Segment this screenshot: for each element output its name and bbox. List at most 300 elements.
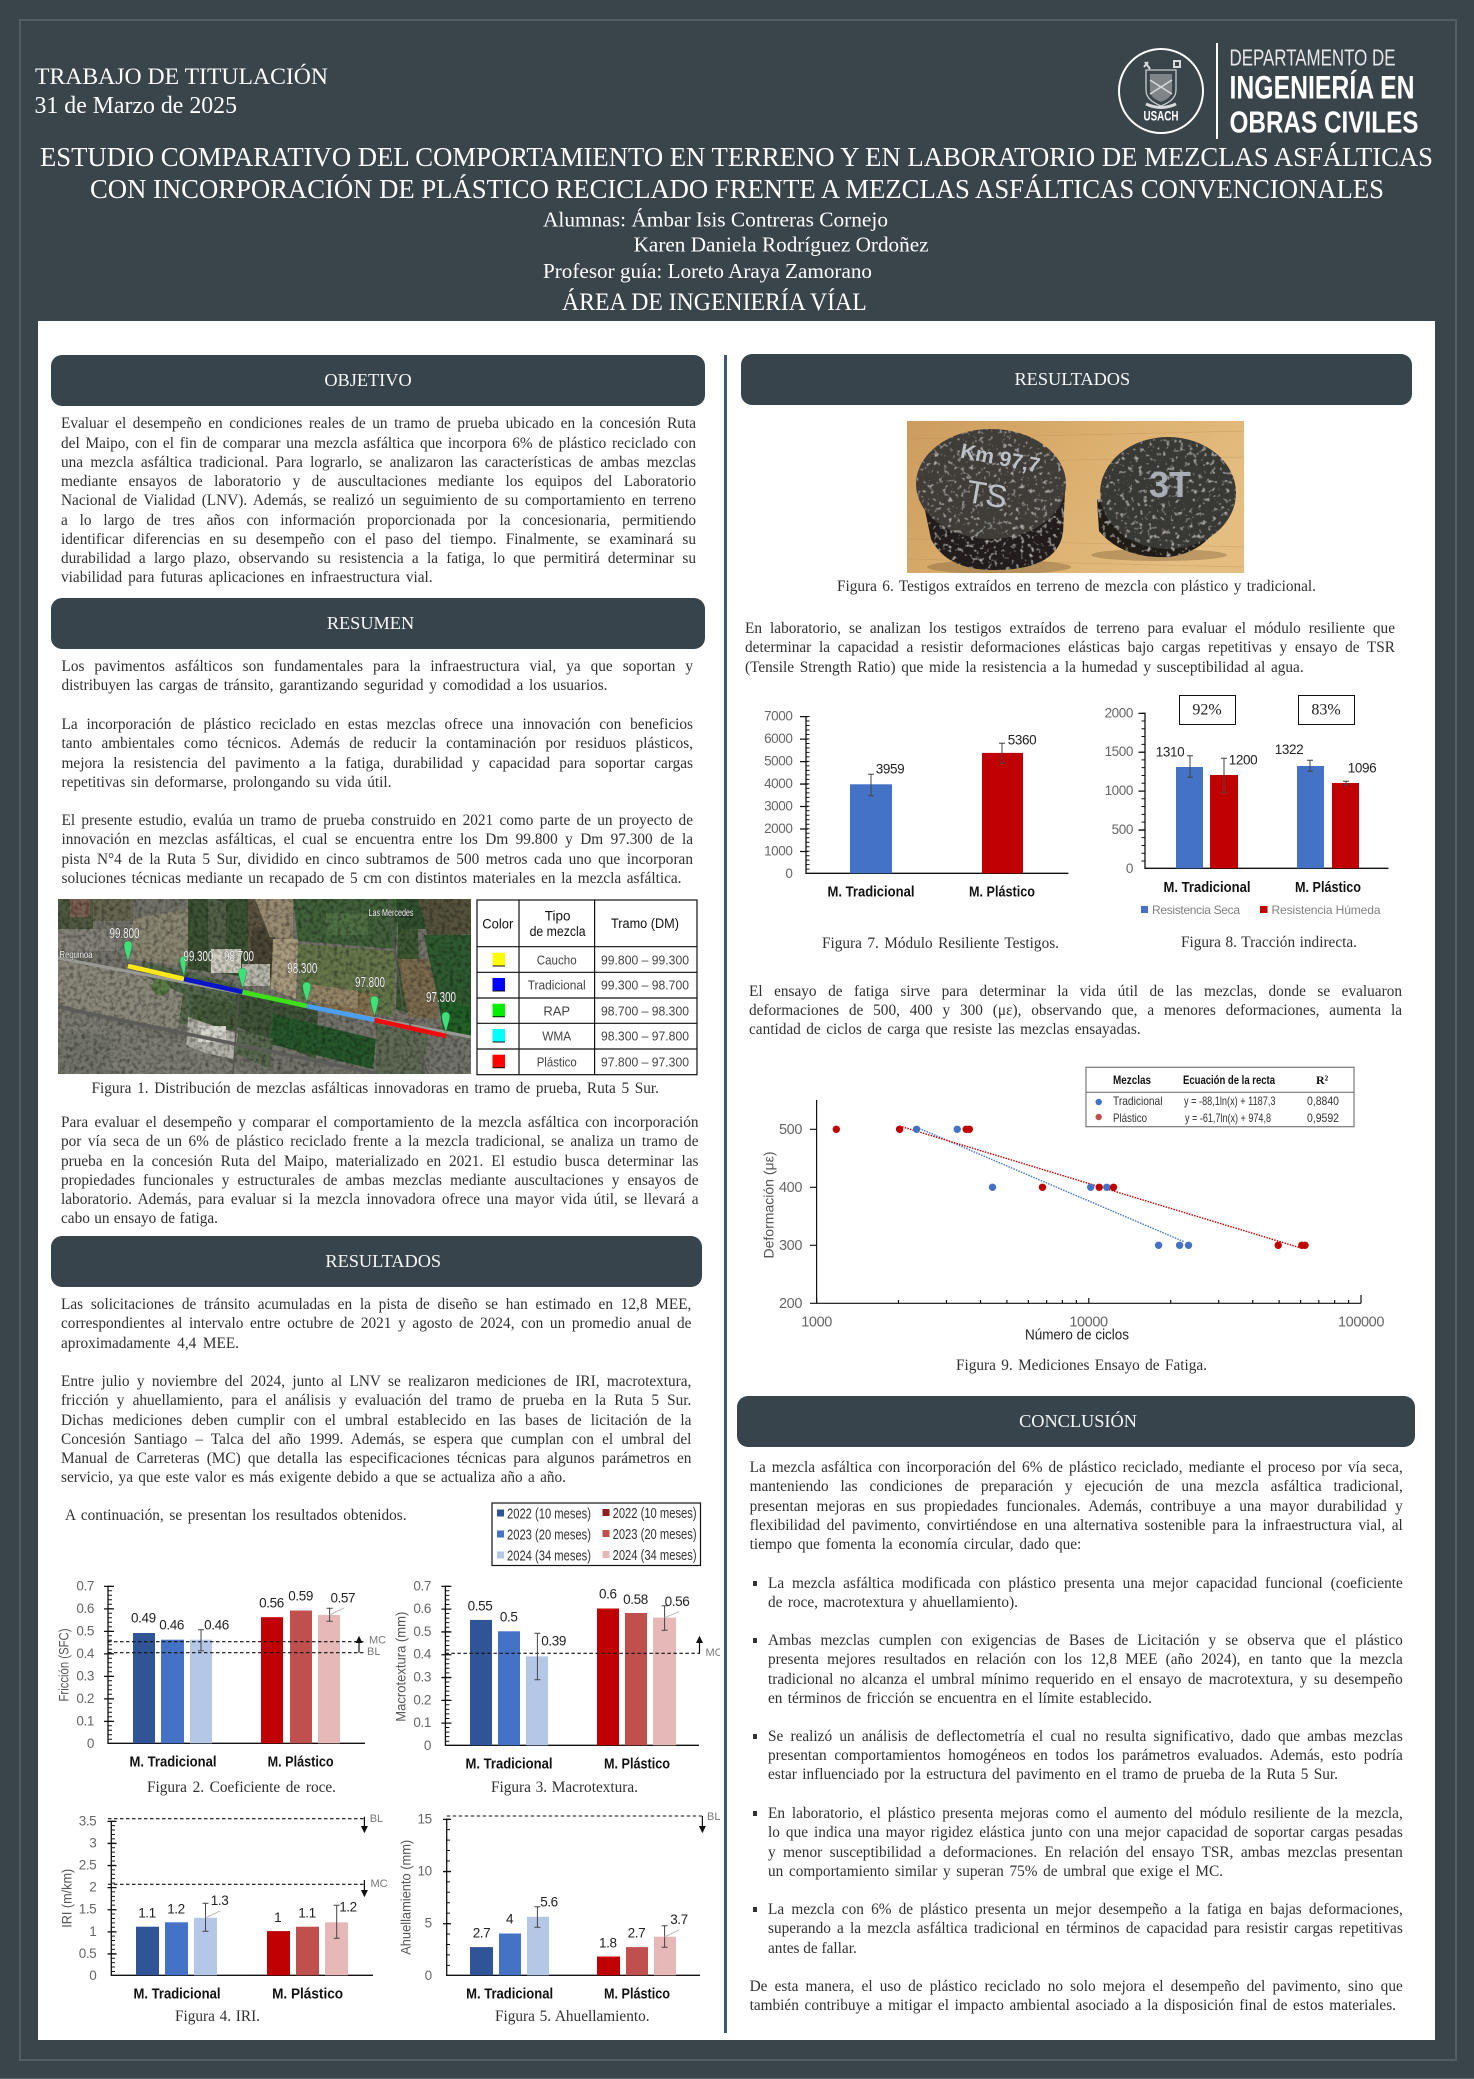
y axis title: Ahuellamiento (mm) (398, 1840, 414, 1955)
y axis title: IRI (m/km) (58, 1869, 74, 1928)
text: resumen 1: Los pavimentos asfálticos son fundamentales para la infraestructura vial, ya que soportan y (62, 658, 693, 675)
bullet 1: de roce, macrotextura y ahuellamiento). (768, 1594, 1018, 1611)
heading: resumen (51, 598, 705, 649)
axes (1142, 713, 1388, 868)
y tick labels: 0 (424, 1738, 431, 1753)
authors (543, 208, 929, 283)
map labels: 98.700 (224, 948, 254, 965)
y tick labels: 3000 (764, 798, 792, 814)
bullet 2: en términos de fricción se encuentra en el límite establecido. (768, 1690, 1152, 1707)
chart: figure 2 friction (56, 1578, 386, 1771)
bullet 4: un comportamiento similar y superan 75% de umbral que exige el MC. (768, 1863, 1223, 1880)
text: traffic: aproximadamente 4,4 MEE. (61, 1335, 239, 1352)
map background fields (58, 899, 471, 1074)
text: conclusion intro: presentan mejoras en sus propiedades funcionales. Además, contribuye a una mayor durabilidad y (750, 1498, 1403, 1515)
axis tick labels: 300 (779, 1238, 802, 1254)
equation table: y = -88,1ln(x) + 1187,3 (1184, 1094, 1276, 1108)
axis tick labels (779, 1122, 1384, 1331)
table grid (477, 900, 697, 1075)
bullet 5: La mezcla con 6% de plástico presenta un mejor desempeño a la fatiga en bajas deformaciones, (768, 1901, 1403, 1918)
value labels: 0.56 (259, 1596, 284, 1611)
value labels: 1096 (1348, 761, 1376, 776)
bullet 2: presenta mejores resultados en relación con los 12,8 MEE (año 2024), en tanto que la mezcla (768, 1651, 1403, 1668)
category labels (466, 1987, 670, 2003)
bars (470, 1917, 676, 1975)
table rows: 97.800 – 97.300 (601, 1054, 689, 1069)
coloured test sections (128, 966, 446, 1036)
table rows: Tradicional (528, 977, 586, 992)
y axis title: Fricción (SFC) (56, 1628, 72, 1702)
category labels (130, 1755, 334, 1771)
category labels: M. Plástico (604, 1757, 670, 1773)
category labels: M. Tradicional (1164, 880, 1250, 896)
axis titles (760, 1152, 1129, 1343)
text: introduction to comparison: cabo un ensayo de fatiga. (61, 1210, 218, 1227)
chart: figure 9 fatigue scatter (760, 1066, 1384, 1343)
heading: resultados right (741, 354, 1412, 405)
threshold arrow and label (696, 1636, 723, 1659)
y tick labels: 0.5 (413, 1624, 431, 1639)
value labels: 0.59 (288, 1589, 313, 1604)
equation table: Mezclas (1113, 1073, 1151, 1087)
text: closing: también contribuye a mitigar el impacto ambiental asociado a la disposición final de estos materiales. (750, 1997, 1396, 2014)
y tick labels: 0.4 (76, 1646, 95, 1661)
bars (1176, 766, 1359, 868)
threshold lines BL and MC (108, 1819, 364, 1884)
text: measurements: servicio, ya que este valor es más exigente debido a que se actualiza año a año. (61, 1469, 566, 1486)
text: introduction to comparison: Para evaluar el desempeño y comparar el comportamiento de la mezcla asfáltica con incorporación (61, 1114, 698, 1131)
error bars (534, 1606, 679, 1680)
chart: figure 8 indirect tensile (1105, 695, 1388, 917)
category labels (466, 1757, 670, 1773)
caption: figure 1: Figura 1. Distribución de mezclas asfálticas innovadoras en tramo de prueba, Ruta 5 Sur. (92, 1080, 659, 1097)
table: mix distribution (476, 899, 698, 1076)
equation table: R² (1316, 1073, 1329, 1087)
text: conclusion intro (750, 1459, 1403, 1553)
caption: figure 4: Figura 4. IRI. (175, 2008, 260, 2025)
y tick labels: 2000 (764, 821, 792, 836)
table header: de mezcla (530, 924, 586, 939)
threshold arrows and labels: BL (370, 1813, 383, 1825)
map labels: 97.300 (426, 989, 456, 1006)
text: resumen 1: distribuyen las cargas de tránsito, garantizando seguridad y comodidad a los usuarios. (62, 677, 608, 694)
text: conclusion intro: tiempo que fomenta la economía circular, dado que: (750, 1536, 1081, 1553)
TSR ratio values (1192, 702, 1341, 718)
y tick labels: 1 (89, 1924, 96, 1939)
axis tick labels: 500 (779, 1122, 802, 1138)
wood table (907, 421, 1244, 573)
table rows (528, 952, 689, 1069)
value labels: 0.56 (665, 1594, 689, 1609)
y tick labels: 2.5 (79, 1858, 96, 1872)
authors: Alumnas: Ámbar Isis Contreras Cornejo (543, 208, 888, 232)
text: resumen 3: innovación en mezclas asfálticas, el cual se encuentra entre los Dm 99.800 y Dm 97.300 de la (62, 831, 693, 848)
bullet 4: y menor susceptibilidad a deformaciones. En relación del ensayo TSR, ambas mezclas presentan (768, 1844, 1403, 1861)
value labels: 0.39 (541, 1634, 566, 1649)
y tick labels: 1.5 (79, 1902, 96, 1917)
bullet 4 (753, 1805, 1403, 1880)
category labels: M. Tradicional (466, 1987, 553, 2003)
y tick labels: 0.2 (76, 1691, 94, 1706)
text: traffic: correspondientes al intervalo entre octubre de 2021 y agosto de 2024, con un promedio anual de (61, 1315, 691, 1332)
value labels: 1 (274, 1910, 281, 1925)
threshold arrows and labels (361, 1813, 388, 1897)
text: objetivo: identificar diferencias en su desempeño con el paso del tiempo. Finalmente, se examinará su (61, 531, 696, 548)
map labels: 97.800 (355, 974, 385, 991)
text: resumen 3 (62, 812, 693, 887)
TSR ratio values: 92% (1192, 702, 1222, 718)
heading: conclusion: CONCLUSIÓN (1019, 1411, 1137, 1431)
table rows: 99.300 – 98.700 (601, 977, 689, 992)
error bars (198, 1608, 344, 1651)
text: objetivo: del Maipo, con el fin de comparar una mezcla asfáltica que incorpora 6% de plástico reciclado con (61, 435, 696, 452)
chart: figure 4 IRI (58, 1813, 388, 2003)
TSR ratio boxes (1180, 696, 1354, 724)
value labels: 0.46 (159, 1618, 184, 1633)
text: introduction to comparison: prueba en la concesión Ruta del Maipo, materializado en 2021. El estudio busca determinar las (61, 1153, 698, 1170)
text: objetivo: viabilidad para futuras aplicaciones en infraestructura vial. (61, 569, 433, 586)
chart: figure 3 macrotexture (392, 1578, 720, 1773)
axes (445, 1586, 699, 1745)
text: objetivo: durabilidad a largo plazo, observando su resistencia a la fatiga, lo que permitirá determinar su (61, 550, 696, 567)
bars (133, 1610, 340, 1743)
map labels: Requinoa (60, 949, 93, 961)
threshold arrow and labels: BL (367, 1646, 380, 1658)
text: closing: De esta manera, el uso de plástico reciclado no solo mejora el desempeño del pavimento, sino que (750, 1978, 1403, 1995)
text: traffic (61, 1296, 691, 1352)
axis tick labels: 10000 (1069, 1315, 1108, 1331)
value labels (131, 1589, 355, 1633)
y tick labels: 6000 (764, 731, 792, 746)
y tick labels (417, 1811, 432, 1983)
value labels (1156, 742, 1376, 776)
text: measurements: Dichas mediciones deben cumplir con el umbral establecido en las bases de licitación de la (61, 1412, 691, 1429)
category labels: M. Tradicional (466, 1757, 552, 1773)
text: objetivo: mediante ensayos de laboratorio y de auscultaciones mediante los equipos del Laboratorio (61, 473, 696, 490)
axis tick labels: 400 (779, 1180, 802, 1196)
text: resumen 3: soluciones técnicas mediante un recapado de 5 cm con distintos materiales en la mezcla asfáltica. (62, 870, 682, 887)
value labels: 1.2 (167, 1901, 185, 1916)
text: measurements: fricción y ahuellamiento, para el análisis y evaluación del tramo de prueba en la Ruta 5 Sur. (61, 1392, 691, 1409)
y tick labels: 0.3 (76, 1668, 94, 1683)
chart: figure 7 resilient modulus (764, 709, 1068, 901)
value labels: 1.3 (211, 1893, 228, 1908)
category labels: M. Plástico (969, 885, 1035, 901)
bullet 3 (753, 1728, 1403, 1783)
white content panel (38, 321, 1435, 2040)
text: conclusion intro: flexibilidad del pavimento, convirtiéndose en una alternativa sostenible para la infraestructura vial, al (750, 1517, 1403, 1534)
title (40, 142, 1433, 204)
department wordmark (1230, 45, 1418, 140)
map labels: 98.300 (287, 960, 317, 977)
value labels: 1200 (1229, 753, 1257, 768)
roads (58, 899, 471, 1074)
bullet 5: antes de fallar. (768, 1940, 857, 1957)
value labels: 1.1 (298, 1905, 316, 1920)
error bars (202, 1903, 340, 1938)
value labels: 4 (506, 1911, 514, 1926)
axes (804, 716, 1068, 873)
text: closing (750, 1978, 1403, 2014)
value labels (876, 732, 1036, 776)
bullet 5 (753, 1901, 1403, 1957)
text: fatigue: cantidad de ciclos de carga que resiste las mezclas ensayadas. (749, 1021, 1141, 1038)
value labels: 0.5 (500, 1610, 517, 1625)
value labels: 1.2 (339, 1899, 357, 1914)
caption: figure 3: Figura 3. Macrotextura. (491, 1779, 638, 1796)
y tick labels: 0.5 (79, 1946, 96, 1961)
text: fatigue (749, 983, 1402, 1038)
y tick labels: 0.2 (413, 1692, 431, 1707)
category labels: M. Tradicional (828, 885, 914, 901)
logo divider (1216, 43, 1218, 139)
category labels (134, 1987, 343, 2003)
text: measurements (61, 1373, 692, 1486)
data points: tradicional (913, 1126, 1192, 1249)
y tick labels: 0 (785, 866, 792, 881)
colour swatches (492, 953, 505, 1068)
map labels: 99.300 (183, 948, 213, 965)
y tick labels: 1500 (1105, 744, 1133, 759)
value labels: 2.7 (473, 1925, 490, 1940)
table header: Tramo (DM) (611, 916, 679, 931)
y tick labels: 2000 (1105, 705, 1133, 720)
text: introduction to comparison: propiedades funcionales y estructurales de ambas mezclas mediante auscultaciones y ensayos de (61, 1172, 698, 1189)
y tick labels (764, 709, 792, 881)
header (34, 43, 1433, 316)
data points: plastico (833, 1126, 1309, 1249)
chart legend: Resistencia Seca (1152, 903, 1240, 917)
authors: Profesor guía: Loreto Araya Zamorano (543, 259, 872, 283)
core: traditional mix (1091, 437, 1236, 561)
equation table: Plástico (1113, 1111, 1147, 1125)
figure 1: satellite map of test section (58, 899, 471, 1074)
text: laboratory: determinar la capacidad a resistir deformaciones elásticas bajo cargas repetitivas y ensayo de TSR (745, 639, 1395, 656)
table header (482, 908, 679, 939)
value labels: 1322 (1275, 742, 1303, 757)
department wordmark: DEPARTAMENTO DE (1230, 45, 1396, 71)
threshold arrow and labels: MC (369, 1634, 386, 1646)
axis titles: Deformación (με) (760, 1151, 776, 1259)
map labels: Las Mercedes (368, 907, 414, 919)
equation table (1086, 1067, 1354, 1127)
thesis label: TRABAJO DE TITULACIÓN (35, 63, 328, 90)
heading: objetivo (51, 355, 705, 406)
equation table: 0,8840 (1307, 1094, 1339, 1108)
threshold line BL (447, 1815, 702, 1817)
text: objetivo: una mezcla asfáltica tradicional. Para lograrlo, se analizaron las características de ambas mezclas (61, 454, 696, 471)
value labels: 5.6 (540, 1895, 558, 1910)
logo: USACH crest: USACH (1144, 108, 1178, 124)
bullet 4: lo que indica una mayor rigidez elástica junto con una mejor capacidad de soportar cargas pesadas (768, 1824, 1403, 1841)
bars (850, 753, 1023, 873)
text: measurements: Entre julio y noviembre del 2024, junto al LNV se realizaron mediciones de IRI, macrotextura, (61, 1373, 691, 1390)
text: resumen 2: mejora la resistencia del pavimento a la fatiga, durabilidad y capacidad para soportar cargas (62, 755, 693, 772)
bullet 3: presentan comportamientos homogéneos en todos los parámetros evaluados. Además, esto podría (768, 1747, 1403, 1764)
map labels (60, 907, 456, 1006)
table rows: Caucho (537, 952, 577, 967)
date: 31 de Marzo de 2025 (34, 93, 237, 119)
table rows: Plástico (537, 1054, 577, 1069)
axis tick labels: 200 (779, 1296, 802, 1312)
value labels: 2.7 (628, 1925, 645, 1940)
value labels (468, 1587, 689, 1649)
value labels: 0.57 (330, 1591, 355, 1606)
y tick labels: 0 (1126, 861, 1133, 876)
trend lines (900, 1126, 1302, 1248)
heading: resultados left: RESULTADOS (325, 1251, 441, 1271)
value labels (473, 1895, 688, 1950)
threshold line MC (445, 1652, 700, 1654)
legend: bar charts (491, 1502, 702, 1566)
category labels: M. Tradicional (130, 1755, 216, 1771)
map labels: 99.800 (110, 925, 140, 942)
text: resumen 2 (62, 716, 693, 791)
y tick labels: 1000 (764, 843, 792, 858)
category labels: M. Plástico (1295, 880, 1361, 896)
y tick labels: 2 (89, 1880, 96, 1895)
heading: resumen: RESUMEN (327, 613, 414, 633)
value labels (138, 1893, 357, 1925)
y tick labels (1105, 705, 1133, 876)
heading: resultados left (51, 1236, 702, 1287)
text: laboratory: (Tensile Strength Ratio) que mide la resistencia a la humedad y susceptibilidad al agua. (745, 659, 1304, 676)
equation table: y = -61,7ln(x) + 974,8 (1185, 1111, 1271, 1125)
table rows: 99.800 – 99.300 (601, 952, 689, 967)
text: resumen 3: El presente estudio, evalúa un tramo de prueba construido en 2021 como parte de un proyecto de (62, 812, 693, 829)
y tick labels: 0.6 (413, 1601, 431, 1616)
value labels: 0.6 (599, 1587, 617, 1602)
caption: figure 9: Figura 9. Mediciones Ensayo de Fatiga. (956, 1357, 1207, 1374)
threshold arrow and label (699, 1811, 720, 1833)
axis tick labels: 100000 (1338, 1315, 1384, 1331)
text: objetivo (61, 415, 696, 586)
text: introduction to comparison (61, 1114, 698, 1227)
table rows: RAP (543, 1003, 570, 1018)
value labels: 1.1 (138, 1905, 156, 1920)
text: fatigue: El ensayo de fatiga sirve para determinar la vida útil de las mezclas, donde se evaluaron (749, 983, 1402, 1000)
value labels: 0.49 (131, 1611, 156, 1626)
text: objetivo: a lo largo de tres años con información proporcionada por la concesionaria, permitiendo (61, 512, 696, 529)
error bars (868, 743, 1005, 796)
axes (447, 1819, 700, 1975)
text: objetivo: Nacional de Vialidad (LNV). Además, se realizó un seguimiento de su comportamiento en terreno (61, 492, 696, 509)
category labels: M. Plástico (604, 1987, 670, 2003)
authors: Karen Daniela Rodríguez Ordoñez (634, 233, 929, 257)
location pins (124, 941, 450, 1033)
chart legend (1141, 903, 1381, 917)
y tick labels: 3 (89, 1835, 96, 1850)
text: results intro: A continuación, se presentan los resultados obtenidos. (65, 1507, 407, 1524)
y tick labels: 0 (89, 1968, 96, 1983)
y tick labels: 0.7 (413, 1578, 431, 1593)
y tick labels: 0.7 (76, 1578, 94, 1593)
caption: figure 8: Figura 8. Tracción indirecta. (1181, 934, 1357, 951)
table rows: 98.700 – 98.300 (601, 1003, 689, 1018)
y tick labels: 500 (1112, 822, 1133, 837)
table rows: 98.300 – 97.800 (601, 1028, 689, 1043)
category labels (1164, 880, 1361, 896)
value labels: 5360 (1008, 732, 1036, 747)
value labels: 1.8 (599, 1935, 617, 1950)
TSR ratio values: 83% (1311, 702, 1341, 718)
legend: bar charts: 2023 (20 meses) (507, 1528, 591, 1544)
error bars (534, 1907, 679, 1947)
y tick labels: 0.5 (76, 1623, 94, 1638)
error bars (1187, 756, 1349, 792)
y tick labels: 10 (417, 1864, 432, 1878)
core: traditional mix: 3T (1149, 464, 1191, 505)
bullet 3: Se realizó un análisis de deflectometría el cual no resulta significativo, dado que ambas mezclas (768, 1728, 1403, 1745)
y tick labels: 0 (425, 1968, 432, 1983)
caption: figure 2: Figura 2. Coeficiente de roce. (147, 1779, 336, 1796)
text: laboratory (745, 620, 1395, 676)
bars (470, 1608, 676, 1745)
text: resumen 2: La incorporación de plástico reciclado en estas mezclas ofrece una innovación con beneficios (62, 716, 693, 733)
category labels: M. Tradicional (134, 1987, 220, 2003)
y tick labels: 5000 (764, 754, 792, 768)
text: measurements: Manual de Carreteras (MC) que detalla las especificaciones técnicas para algunos parámetros en (61, 1450, 691, 1467)
legend: bar charts: 2024 (34 meses) (507, 1548, 591, 1564)
text: measurements: Concesión Santiago – Talca del año 1999. Además, se espera que cumplan con el umbral del (61, 1431, 691, 1448)
text: laboratory: En laboratorio, se analizan los testigos extraídos de terreno para evaluar el módulo resiliente que (745, 620, 1395, 637)
y tick labels: 0.3 (413, 1670, 431, 1684)
text: fatigue: deformaciones de 500, 400 y 300 (με), observando que, a menores deformaciones, aumenta la (749, 1002, 1402, 1019)
bullet 1 (753, 1575, 1403, 1611)
logo: USACH crest (1119, 49, 1203, 133)
area: ÁREA DE INGENIERÍA VÍAL (562, 288, 867, 316)
figure 6: photo of asphalt cores (907, 421, 1244, 573)
text: objetivo: Evaluar el desempeño en condiciones reales de un tramo de prueba ubicado en la concesión Ruta (61, 415, 696, 432)
bullet 2: Ambas mezclas cumplen con exigencias de Bases de Licitación y se observa que el plástico (768, 1632, 1403, 1649)
text: resumen 2: repetitivas sin deformarse, prolongando su vida útil. (62, 774, 392, 791)
text: resumen 2: tanto ambientales como técnicos. Además de reducir la contaminación por residuos plásticos, (62, 735, 693, 752)
table header: Color (482, 916, 514, 932)
value labels: 0.58 (623, 1592, 648, 1607)
department wordmark: INGENIERÍA EN (1230, 70, 1414, 106)
threshold arrow and labels (356, 1634, 386, 1658)
text: introduction to comparison: por vía seca de un 6% de plástico reciclado frente a la mezcla tradicional, se analiza un tramo de (61, 1133, 698, 1150)
bullet 5: superando a la mezcla asfáltica tradicional en términos de capacidad para resistir cargas repetitivas (768, 1920, 1403, 1937)
bars (136, 1918, 348, 1975)
value labels: 3.7 (670, 1912, 688, 1927)
text: resumen 3: pista N°4 de la Ruta 5 Sur, dividido en cinco subtramos de 500 metros cada uno que incorporan (62, 851, 693, 868)
axes (108, 1586, 365, 1743)
y tick labels: 0.1 (413, 1715, 431, 1730)
title: CON INCORPORACIÓN DE PLÁSTICO RECICLADO FRENTE A MEZCLAS ASFÁLTICAS CONVENCIONALES (90, 174, 1384, 204)
caption: figure 5: Figura 5. Ahuellamiento. (495, 2008, 650, 2025)
text: conclusion intro: manteniendo las condiciones de preparación y ejecución de una mezcla asfáltica tradicional, (750, 1478, 1403, 1495)
axis tick labels: 1000 (801, 1315, 832, 1331)
threshold lines MC and BL (108, 1642, 364, 1653)
chart legend: Resistencia Húmeda (1272, 903, 1381, 917)
y tick labels (79, 1813, 96, 1983)
text: introduction to comparison: laboratorio. Además, para evaluar si la mezcla innovadora ofrece una mayor vida útil, se llevará a (61, 1191, 698, 1208)
y tick labels (413, 1578, 432, 1753)
caption: figure 6: Figura 6. Testigos extraídos en terreno de mezcla con plástico y tradicional. (837, 578, 1316, 595)
axis titles: Número de ciclos (1025, 1327, 1129, 1343)
bullet 2 (753, 1632, 1403, 1707)
axes (111, 1821, 373, 1975)
equation table: Tradicional (1113, 1094, 1162, 1108)
bullet 1: La mezcla asfáltica modificada con plástico presenta una mejor capacidad funcional (coeficiente (768, 1575, 1403, 1592)
equation table: 0,9592 (1307, 1111, 1339, 1125)
y tick labels: 3.5 (79, 1813, 96, 1828)
bullet 4: En laboratorio, el plástico presenta mejoras como el aumento del módulo resiliente de la mezcla, (768, 1805, 1403, 1822)
table header: Tipo (545, 908, 570, 924)
y tick labels: 4000 (764, 776, 792, 791)
text: conclusion intro: La mezcla asfáltica con incorporación del 6% de plástico reciclado, mediante el proceso por vía seca, (750, 1459, 1403, 1476)
